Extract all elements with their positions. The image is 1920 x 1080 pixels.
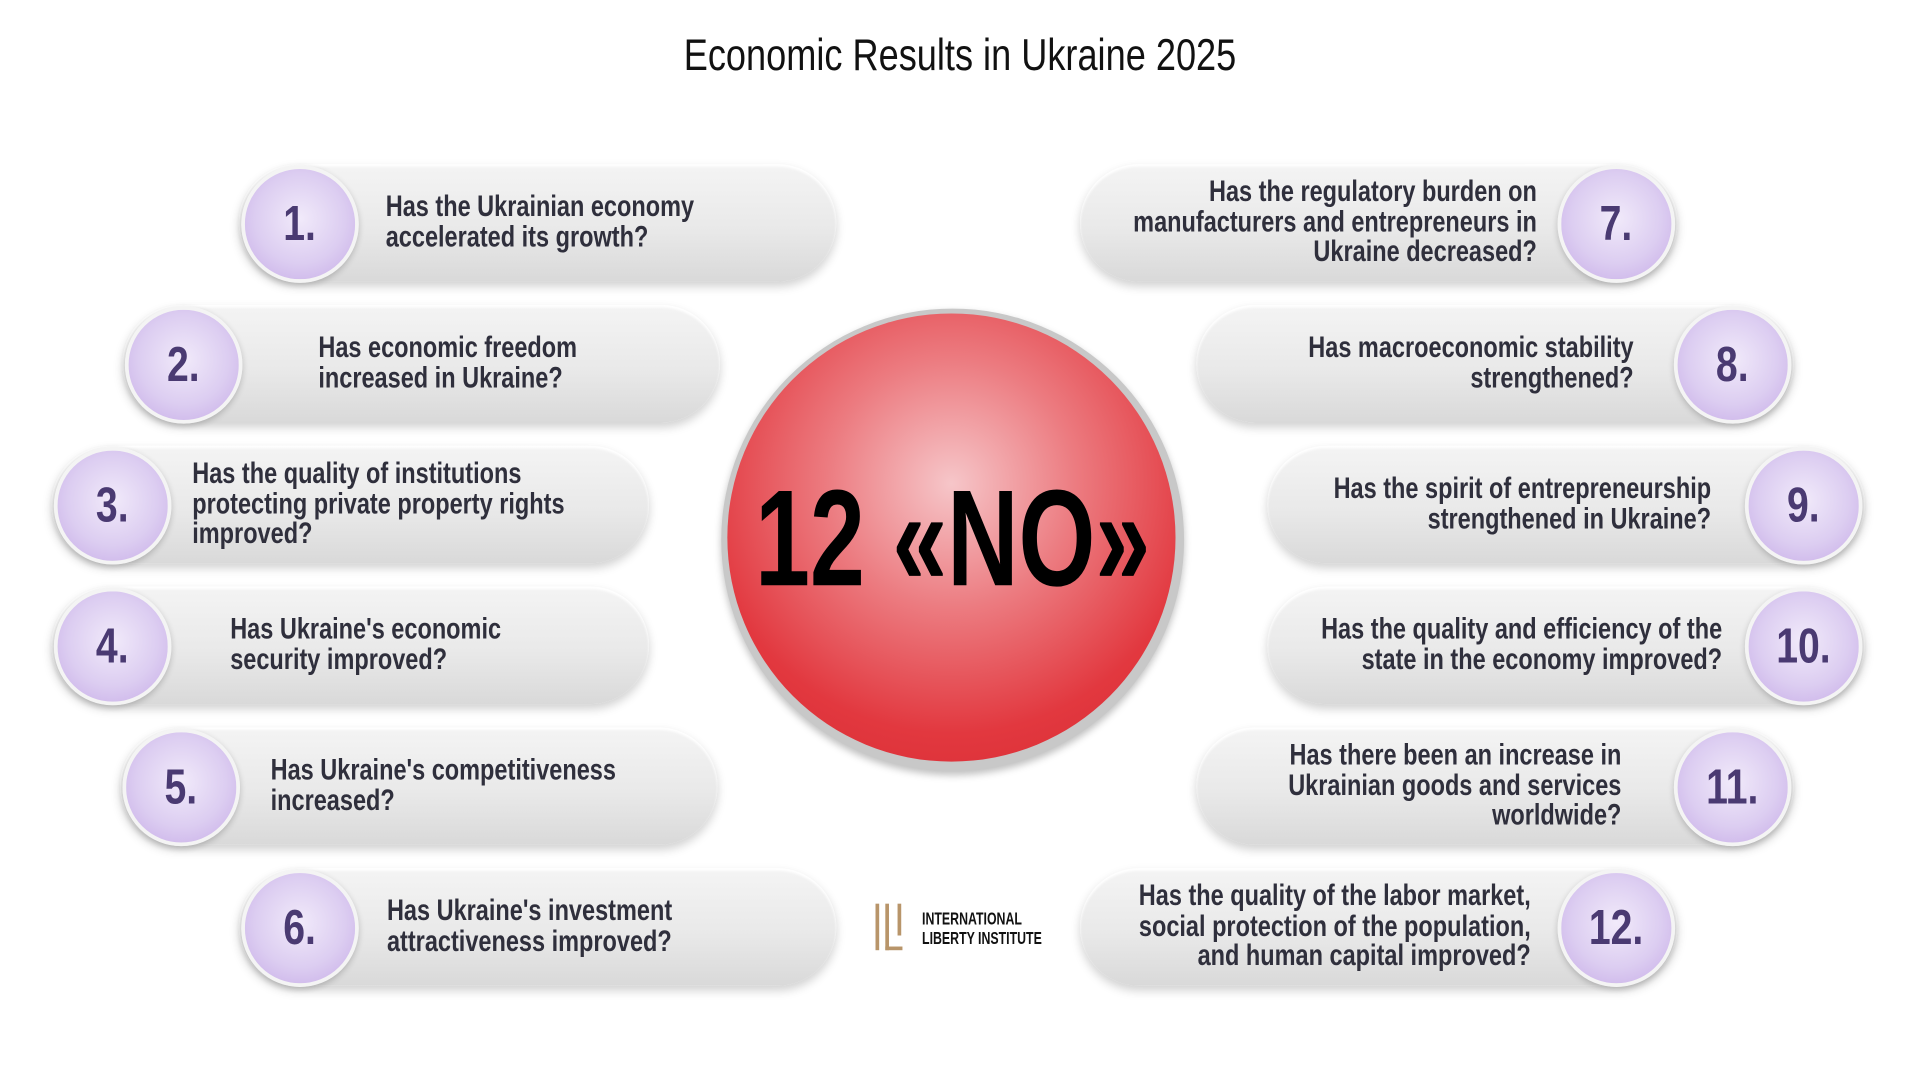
item 8 bbox=[1196, 305, 1794, 422]
item 4 bbox=[51, 587, 649, 704]
logo: LIBERTY INSTITUTE bbox=[922, 928, 1042, 948]
item 7: 7. bbox=[1600, 197, 1633, 251]
item 6 bbox=[239, 868, 836, 986]
item 9: strengthened in Ukraine? bbox=[1427, 502, 1711, 535]
item 6: Has Ukraine's investment bbox=[387, 894, 672, 928]
center circle bbox=[721, 309, 1184, 771]
item 7: Ukraine decreased? bbox=[1313, 235, 1537, 268]
item 1: Has the Ukrainian economy bbox=[386, 190, 694, 223]
item 12: and human capital improved? bbox=[1197, 939, 1531, 973]
item 2: Has economic freedom bbox=[318, 331, 577, 364]
item 1 bbox=[239, 164, 836, 282]
item 11 bbox=[1196, 727, 1794, 845]
item 7: manufacturers and entrepreneurs in bbox=[1133, 205, 1537, 238]
item 11: Ukrainian goods and services bbox=[1288, 769, 1621, 802]
item 9: 9. bbox=[1787, 479, 1820, 533]
item 12: 12. bbox=[1589, 901, 1644, 955]
item 4: security improved? bbox=[230, 643, 447, 676]
item 2: 2. bbox=[167, 338, 200, 392]
item 7 bbox=[1080, 164, 1678, 282]
item 3 bbox=[51, 446, 649, 563]
item 12 bbox=[1080, 868, 1678, 986]
item 1: 1. bbox=[284, 197, 316, 251]
item 5: increased? bbox=[271, 784, 395, 817]
item 8: Has macroeconomic stability bbox=[1308, 331, 1633, 364]
center text: 12 «NO» bbox=[755, 462, 1150, 615]
item 3: 3. bbox=[96, 479, 129, 533]
item 9: Has the spirit of entrepreneurship bbox=[1333, 472, 1711, 505]
item 5 bbox=[120, 727, 718, 845]
item 3: protecting private property rights bbox=[192, 487, 565, 520]
item 3: Has the quality of institutions bbox=[192, 457, 521, 490]
item 12: social protection of the population, bbox=[1139, 909, 1531, 943]
item 2: increased in Ukraine? bbox=[318, 361, 563, 394]
item 10: 10. bbox=[1776, 620, 1831, 673]
item 11: Has there been an increase in bbox=[1289, 739, 1621, 772]
item 6: 6. bbox=[284, 901, 316, 955]
item 5: Has Ukraine's competitiveness bbox=[271, 754, 616, 787]
title: Economic Results in Ukraine 2025 bbox=[684, 29, 1236, 80]
item 7: Has the regulatory burden on bbox=[1209, 175, 1537, 208]
item 2 bbox=[122, 305, 720, 422]
item 10: state in the economy improved? bbox=[1361, 643, 1722, 676]
item 4: 4. bbox=[96, 620, 129, 673]
item 10 bbox=[1267, 587, 1865, 704]
logo: INTERNATIONAL bbox=[922, 909, 1022, 928]
item 8: 8. bbox=[1716, 338, 1749, 392]
item 3: improved? bbox=[192, 517, 312, 550]
item 11: 11. bbox=[1706, 760, 1759, 814]
item 9 bbox=[1267, 446, 1865, 563]
item 5: 5. bbox=[165, 760, 198, 814]
item 6: attractiveness improved? bbox=[387, 924, 672, 958]
item 4: Has Ukraine's economic bbox=[230, 613, 501, 646]
item 11: worldwide? bbox=[1492, 799, 1621, 832]
item 8: strengthened? bbox=[1470, 361, 1633, 394]
item 12: Has the quality of the labor market, bbox=[1139, 879, 1531, 913]
item 1: accelerated its growth? bbox=[386, 220, 648, 253]
item 10: Has the quality and efficiency of the bbox=[1321, 613, 1722, 646]
logo bbox=[876, 904, 1042, 950]
